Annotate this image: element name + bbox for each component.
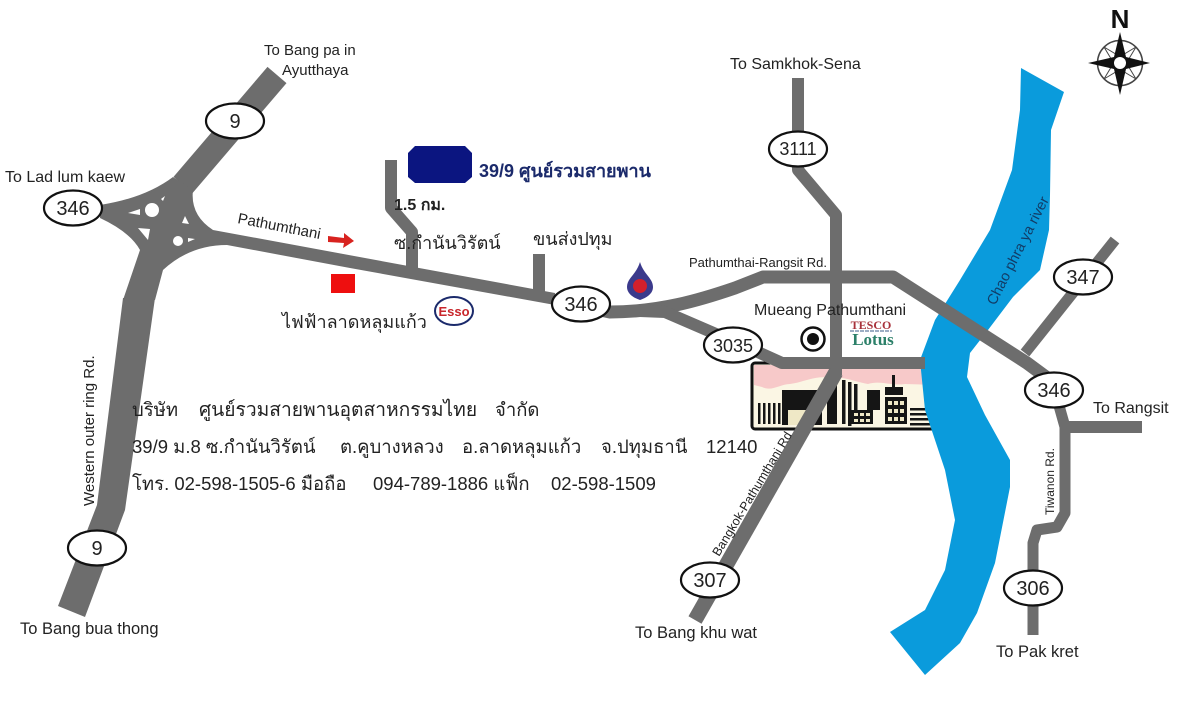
shield 346 east: [1025, 372, 1083, 408]
road: Bangkok-Pathumthani: [695, 372, 836, 620]
shield 346 east: 346: [1037, 380, 1071, 402]
shield 347: [1054, 260, 1112, 294]
label Tiwanon: Tiwanon Rd.: [1043, 448, 1057, 515]
soi label: ซ.กำนันวิรัตน์: [394, 233, 501, 253]
company name: จำกัด: [495, 399, 539, 420]
road: highway 9 north: [183, 75, 277, 185]
shield 306: [1004, 570, 1062, 606]
shield 3111: [769, 132, 827, 166]
road: main 346 east: [555, 277, 1050, 380]
shield 346 west: 346: [56, 198, 90, 220]
icon: PTT flame: [627, 262, 653, 300]
label Lad lum kaew: To Lad lum kaew: [5, 169, 126, 186]
label Pathumthai-Rangsit: Pathumthai-Rangsit Rd.: [689, 255, 827, 270]
shield 307: [681, 562, 739, 598]
address line: 39/9 ม.8 ซ.กำนันวิรัตน์: [132, 436, 316, 457]
road: 3111 north: [798, 78, 836, 375]
icon: Esso: [435, 297, 473, 325]
road: Tiwanon: [1033, 395, 1065, 635]
interchange holes: [128, 196, 195, 246]
road: 3035 branch: [640, 311, 925, 363]
compass main star: [1088, 32, 1150, 95]
phone line: 094-789-1886 แฟ็ก: [373, 471, 530, 494]
road network: [58, 75, 1142, 635]
Khon Song Pathum label: ขนส่งปทุม: [533, 229, 613, 250]
label Rangsit: To Rangsit: [1093, 400, 1169, 417]
shield 346 west: [44, 190, 102, 226]
shield 307: 307: [693, 570, 727, 592]
shield 9 north: [206, 104, 264, 138]
shield 3035: 3035: [713, 336, 753, 356]
label Samkhok-Sena: To Samkhok-Sena: [730, 56, 861, 73]
company location label: 39/9 ศูนย์รวมสายพาน: [479, 160, 652, 183]
shield 346 centre: [552, 286, 610, 322]
label Mueang Pathumthani: Mueang Pathumthani: [754, 302, 906, 319]
shield 9 south: 9: [91, 538, 103, 560]
logo: Tesco Lotus: TESCO: [851, 318, 891, 332]
shield 3111: 3111: [779, 139, 817, 159]
shield 9 south: [68, 530, 126, 566]
phone line: 02-598-1509: [551, 473, 656, 494]
red square landmark: [331, 274, 355, 293]
address line: จ.ปทุมธานี: [601, 436, 688, 459]
red arrow: [328, 233, 354, 248]
shield 3035: [704, 328, 762, 362]
compass diagonal points: [1104, 47, 1136, 79]
icon: city marker: [802, 328, 824, 350]
road: western outer ring: [58, 298, 155, 617]
shield 346 centre: 346: [564, 294, 598, 316]
company address: [132, 398, 757, 494]
skyline illustration: [752, 363, 942, 429]
label Bang bua thong: To Bang bua thong: [20, 620, 159, 638]
logo: Tesco Lotus: [850, 318, 894, 349]
label Pathumthani: Pathumthani: [236, 210, 322, 243]
compass ring: [1098, 40, 1142, 86]
distance label: 1.5 กม.: [394, 197, 445, 214]
route shields: [44, 104, 1112, 606]
road: soi Kamnan Wirat: [391, 160, 412, 268]
river: Chao Phraya: [890, 68, 1064, 675]
north letter: N: [1111, 4, 1129, 34]
road: 347: [1025, 240, 1115, 353]
skyline frame: [752, 363, 942, 429]
compass rose: [1088, 4, 1150, 95]
building windows: [788, 401, 904, 425]
shield 306: 306: [1016, 578, 1050, 600]
company name: บริษัท: [132, 399, 178, 420]
company name: ศูนย์รวมสายพานอุตสาหกรรมไทย: [199, 398, 477, 422]
address line: ต.คูบางหลวง: [340, 436, 444, 458]
label Western outer ring: Western outer ring Rd.: [81, 355, 98, 506]
label Bangkok-Pathumthani: Bangkok-Pathumthani Rd: [710, 429, 795, 559]
address line: อ.ลาดหลุมแก้ว: [462, 436, 581, 459]
road: interchange and main 346 west: [100, 177, 555, 305]
buildings: [758, 375, 938, 426]
river label: Chao phra ya river: [984, 194, 1053, 308]
road: Khon Song Pathum: [533, 254, 545, 298]
logo: Tesco Lotus: Lotus: [852, 330, 894, 349]
road: to Rangsit: [1065, 421, 1142, 433]
compass hub: [1114, 57, 1126, 69]
label Bang khu wat: To Bang khu wat: [635, 624, 757, 642]
label Pak kret: To Pak kret: [996, 643, 1079, 661]
phone line: โทร. 02-598-1505-6 มือถือ: [132, 473, 346, 494]
shield 347: 347: [1066, 267, 1100, 289]
shield 9 north: 9: [229, 111, 241, 133]
company location marker: [408, 146, 472, 183]
label Bang pa in: To Bang pa in: [264, 42, 356, 59]
substation label: ไฟฟ้าลาดหลุมแก้ว: [280, 311, 427, 333]
address line: 12140: [706, 436, 757, 457]
pink sky: [754, 365, 938, 389]
icon: Esso: Esso: [438, 304, 470, 319]
label Ayutthaya: Ayutthaya: [282, 62, 349, 79]
